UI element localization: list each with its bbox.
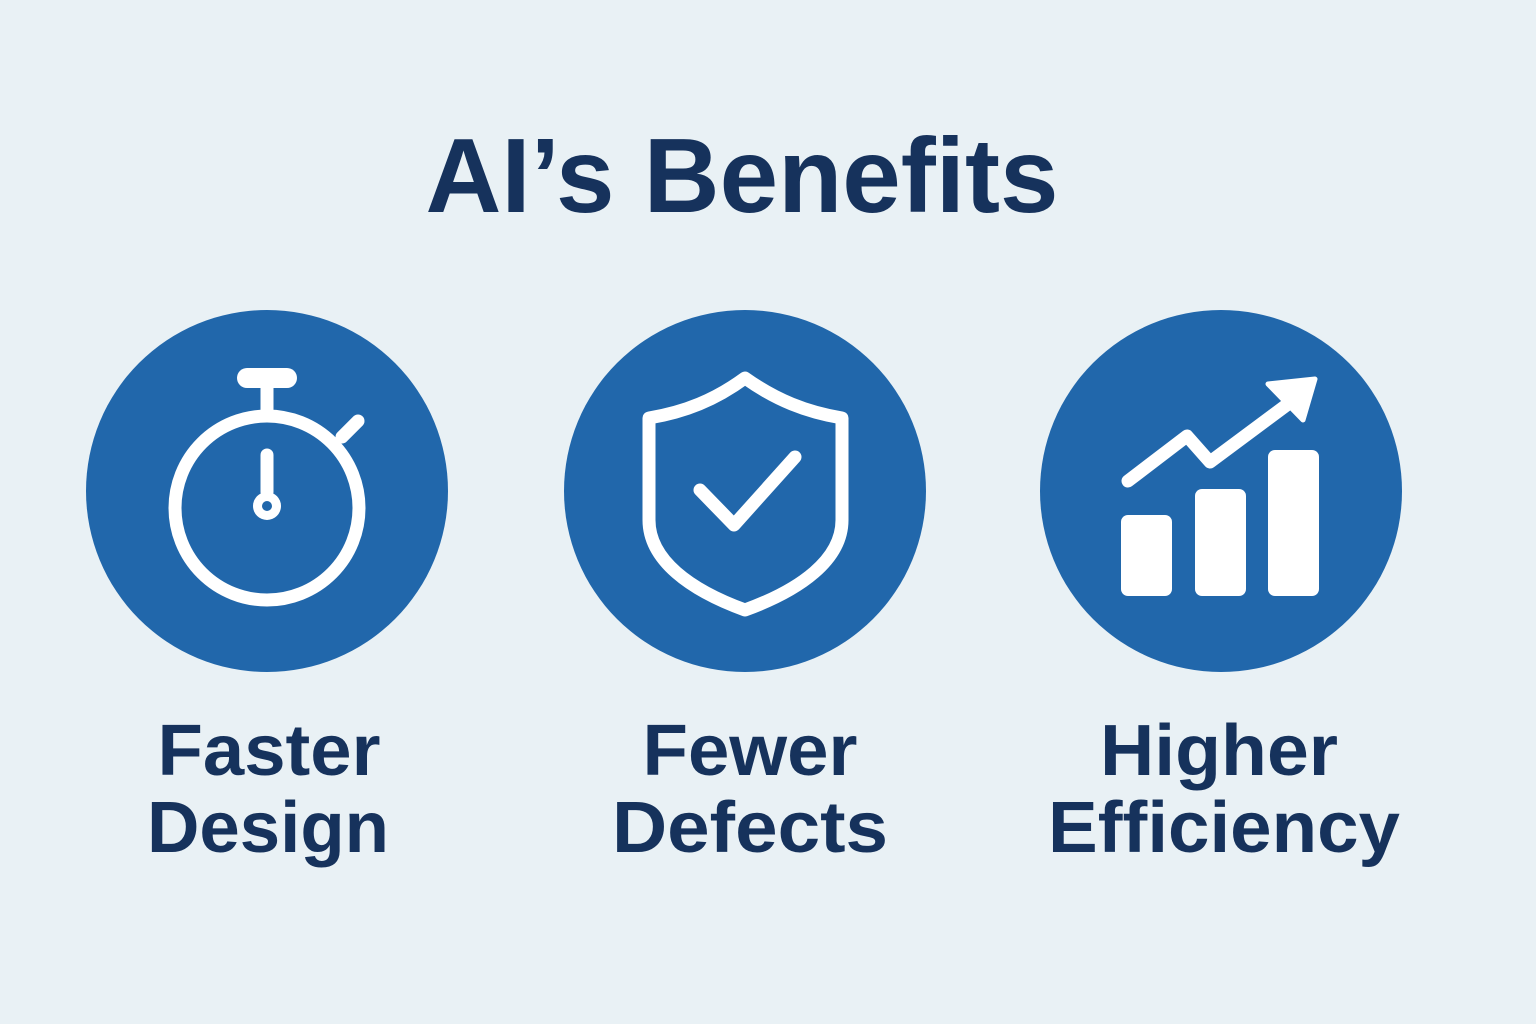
label: faster design: Faster [158, 711, 380, 791]
panel: higher efficiency [1040, 310, 1402, 868]
panel: fewer defects [564, 310, 926, 868]
label: higher efficiency: Efficiency [1048, 788, 1400, 868]
label: fewer defects: Fewer [642, 711, 858, 791]
label: faster design [147, 711, 389, 868]
panel: faster design [86, 310, 448, 868]
label: higher efficiency: Higher [1100, 711, 1338, 791]
title: AI’s Benefits [426, 117, 1058, 235]
label: fewer defects: Defects [612, 788, 888, 868]
icon: stopwatch [86, 310, 448, 672]
icon: growth bar chart [1040, 310, 1402, 672]
label: fewer defects [612, 711, 888, 868]
label: higher efficiency [1048, 711, 1400, 868]
icon: shield with check [564, 310, 926, 672]
label: faster design: Design [147, 788, 389, 868]
